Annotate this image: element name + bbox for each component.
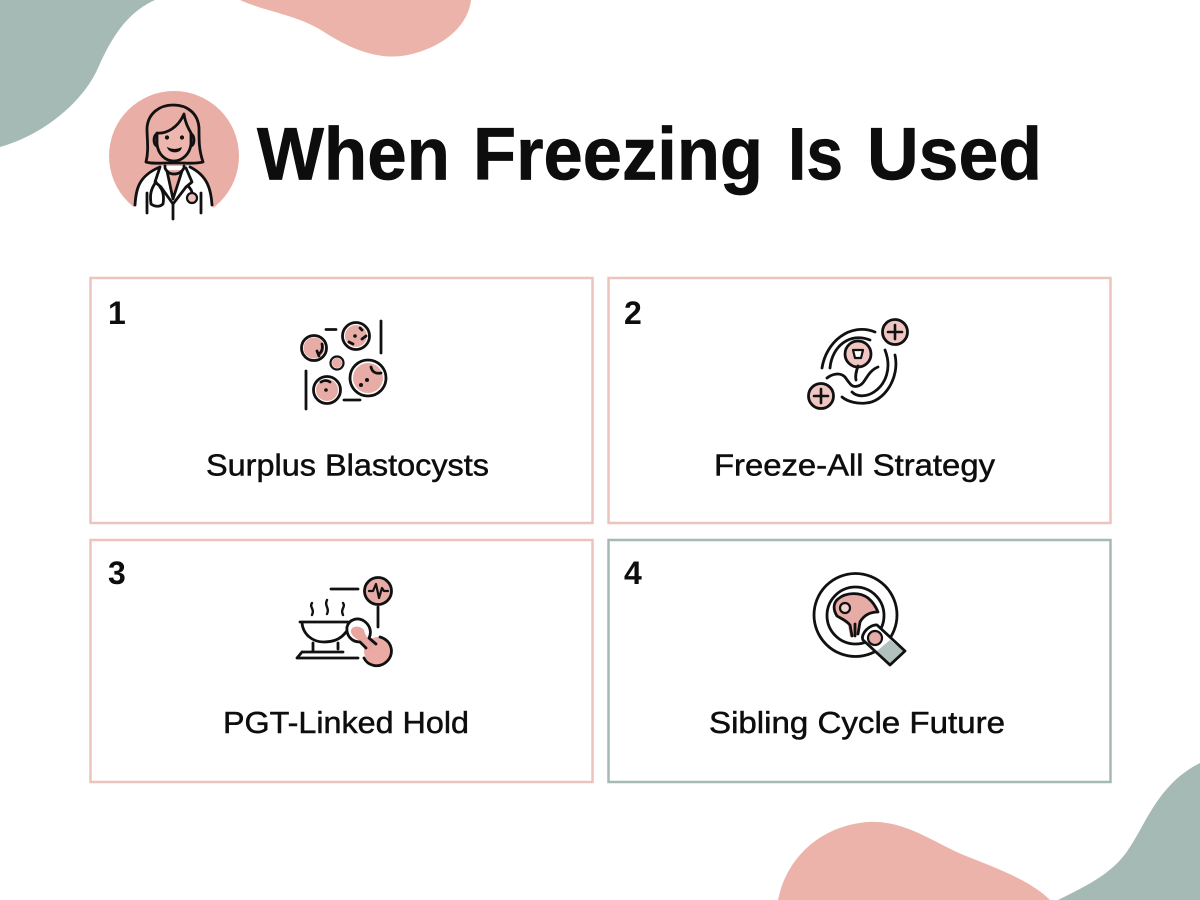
title — [257, 112, 1042, 196]
icon: doctor avatar — [109, 91, 239, 228]
label: PGT-Linked Hold — [223, 706, 469, 740]
number 1: 1 — [108, 295, 126, 331]
title: Is — [788, 112, 843, 196]
blob: pink top — [240, 0, 471, 57]
title: Freezing — [473, 112, 763, 196]
blob: teal bottom right — [1058, 763, 1200, 900]
panel: surplus blastocysts — [90, 278, 592, 523]
blob: teal top left — [0, 0, 155, 147]
title: Used — [867, 112, 1042, 196]
icon: uterus dish with tag — [814, 574, 905, 665]
panel: freeze-all strategy — [608, 278, 1110, 523]
number 4: 4 — [624, 555, 642, 591]
number 3: 3 — [108, 555, 126, 591]
blob: pink bottom — [778, 822, 1050, 900]
panel: pgt-linked hold — [90, 540, 592, 782]
label: Surplus Blastocysts — [206, 448, 489, 482]
label: Freeze-All Strategy — [714, 448, 996, 482]
number 2: 2 — [624, 295, 642, 331]
label: Sibling Cycle Future — [709, 706, 1005, 740]
icon: heated dish and probe — [297, 578, 392, 666]
panel: sibling cycle future — [608, 540, 1110, 782]
icon: freeze-all — [808, 320, 908, 408]
icon: blastocysts — [302, 321, 386, 409]
title: When — [257, 112, 450, 196]
